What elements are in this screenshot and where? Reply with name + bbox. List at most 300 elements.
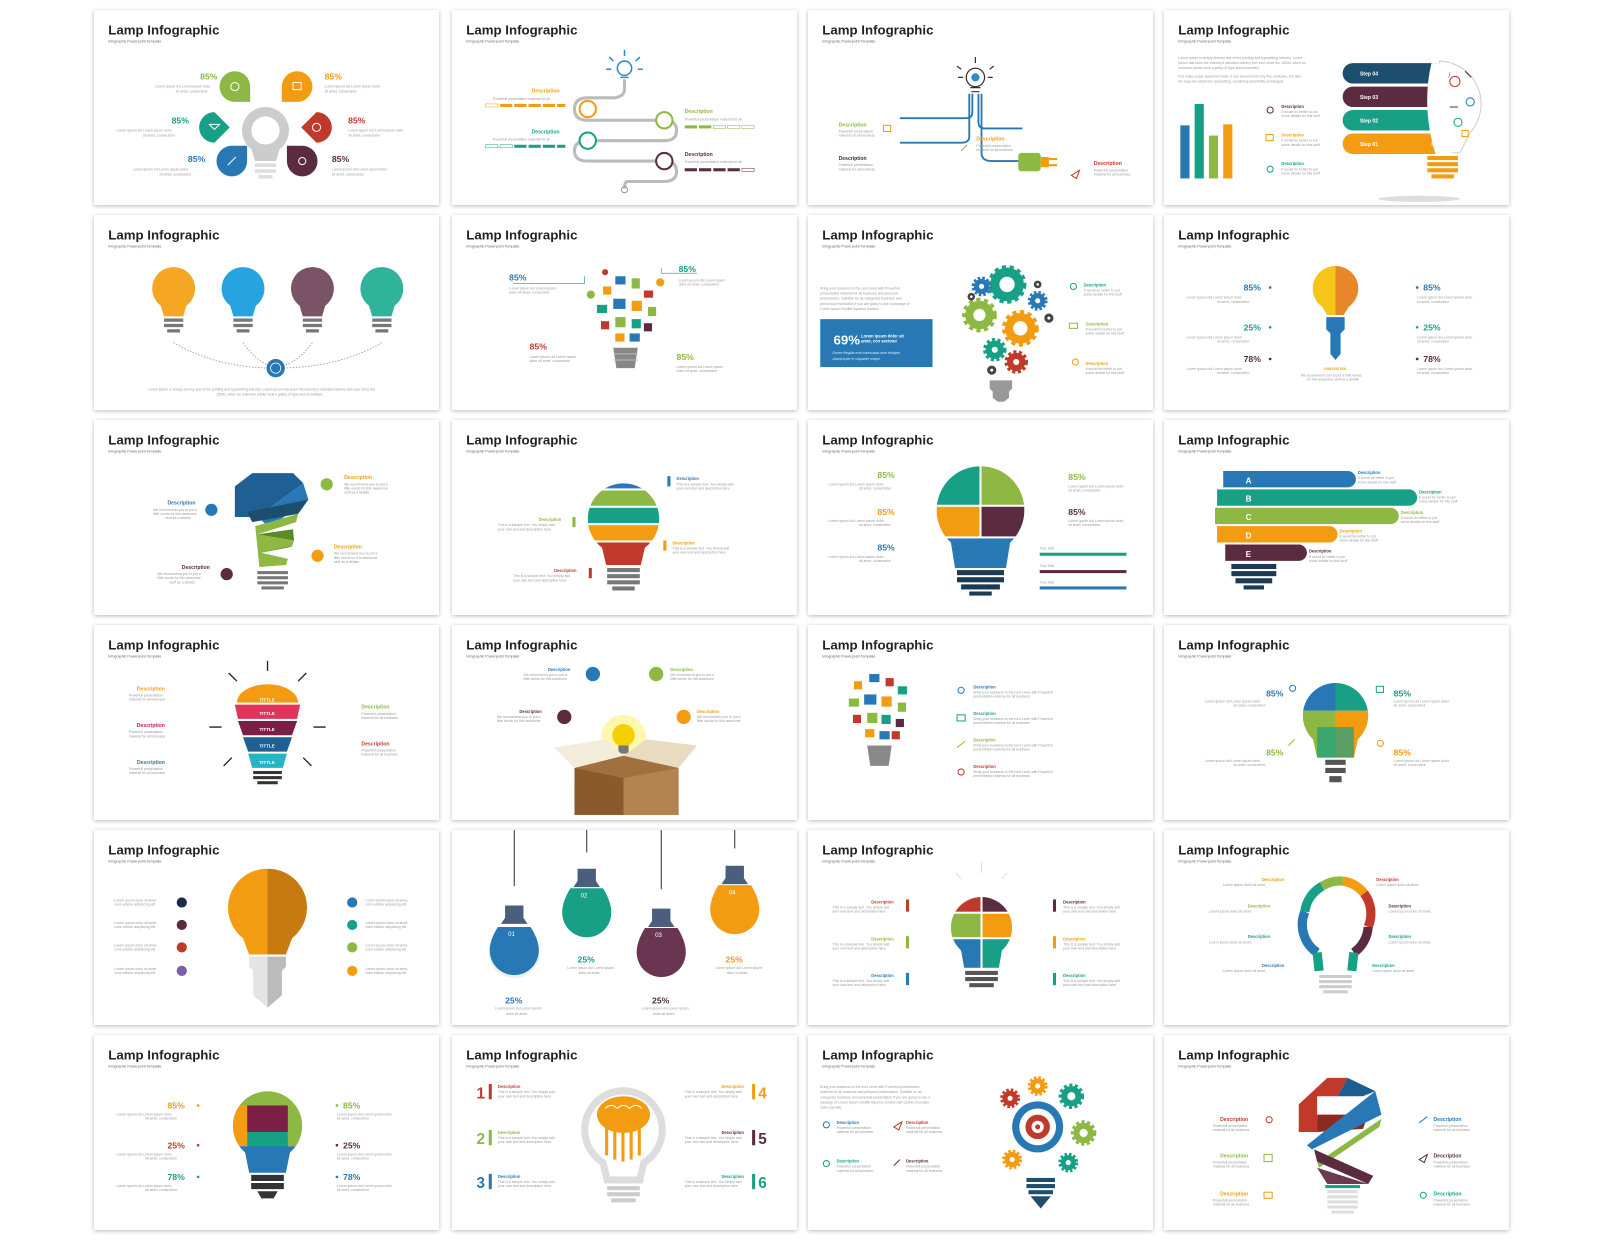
- slide 13: funnel bulb: [94, 625, 439, 820]
- slide 9: ribbon bulb: stuff as a details.: [344, 491, 370, 495]
- slide 21: puzzle bulb percent: 78%: [343, 1172, 361, 1182]
- slide 24: ribbon bulb 2: Powerfull presentation: [1213, 1198, 1247, 1202]
- slide 6: icon bulb: Infographic Powerpoint Template: [466, 245, 519, 249]
- slide 24: ribbon bulb 2: Powerfull presentation: [1213, 1161, 1247, 1165]
- slide 3: lamp with plug: Description: [839, 156, 867, 162]
- slide 4: steps bulb: 03: [1431, 95, 1437, 101]
- slide 11: quadrant bulb: Lamp Infographic: [822, 433, 933, 448]
- slide 6: icon bulb: Lorem ipsum dol Lorem ipsum: [530, 355, 576, 359]
- skill bars: Your Skill: [1040, 547, 1054, 551]
- slide 16: puzzle bulb: Infographic Powerpoint Template: [1178, 655, 1231, 659]
- slide 9: ribbon bulb: little words for this awesome: [157, 576, 201, 580]
- slide 11: quadrant bulb: sit amet, consectetur: [859, 559, 892, 563]
- slide 18: hanging bulbs: dolor sit amet.: [653, 1012, 675, 1016]
- slide 16: puzzle bulb: Lorem ipsum dol Lorem ipsum dolor: [1205, 759, 1261, 763]
- slide 12: ABCDE bands: Description: [1419, 490, 1442, 495]
- slide 19: six-part bulb: your own text and description here.: [832, 946, 887, 950]
- slide 15: doodle bulb list: Description: [973, 764, 996, 769]
- slide 16: puzzle bulb: sit amet, consectetur: [1394, 763, 1427, 767]
- slide 8: key bulb: Lorem ipsum dol Lorem ipsum dolor: [1417, 367, 1473, 371]
- slide 9: ribbon bulb: little words for this awesome: [334, 556, 378, 560]
- slide 1: petal bulb: Lorem ipsum dol Lorem ipsum dolor: [116, 128, 173, 132]
- slide 8: key bulb: 25%: [1423, 322, 1441, 332]
- slide 1: petal bulb: Lorem ipsum dol Lorem ipsum dolor: [155, 85, 211, 89]
- slide 18: hanging bulbs: dolor sit amet.: [579, 971, 600, 975]
- slide 18: hanging bulbs: [452, 830, 797, 1025]
- slide 13: funnel bulb: Powerfull presentation: [129, 693, 163, 697]
- slide 4: steps bulb: Description: [1281, 133, 1304, 138]
- slide 23: target gears bulb: Powerfull presentation: [906, 1165, 940, 1169]
- slide 13: funnel bulb: material for all business: [361, 716, 398, 720]
- slide 15: doodle bulb list: presentation material for all business: [973, 721, 1030, 725]
- slide 11: quadrant bulb: Infographic Powerpoint Template: [822, 450, 875, 454]
- slide 4: steps bulb: It would be better to put: [1281, 139, 1318, 143]
- slide 22: brain bulb: Description: [498, 1130, 521, 1135]
- slide 23: target gears bulb: Description: [906, 1120, 929, 1125]
- slide 2: winding path: Description: [685, 152, 713, 158]
- slide 8: key bulb: [1164, 215, 1509, 410]
- slide 8: key bulb: sit amet, consectetur: [1417, 340, 1450, 344]
- slide 21: puzzle bulb percent: Lorem ipsum dol Lorem ipsum dolor: [116, 1113, 173, 1117]
- slide 15: doodle bulb list: presentation material for all business: [973, 694, 1030, 698]
- slide 23: target gears bulb: Infographic Powerpoint Template: [822, 1065, 875, 1069]
- slide 12: ABCDE bands: B: [1246, 495, 1252, 504]
- slide 21: puzzle bulb percent: sit amet, consectetur: [145, 1188, 178, 1192]
- slide 21: puzzle bulb percent: Lorem ipsum dol Lorem ipsum dolor: [116, 1152, 173, 1156]
- slide 13: funnel bulb: Powerfull presentation: [129, 730, 163, 734]
- slide 8: key bulb: We recommend you to put a little words: [1301, 373, 1362, 377]
- slide 18: hanging bulbs: dolor sit amet.: [506, 1012, 528, 1016]
- bulb 04: 04: [729, 889, 736, 896]
- slide 21: puzzle bulb percent: Infographic Powerpoint Template: [108, 1065, 161, 1069]
- slide 14: box bulb: We recommend you to put a: [523, 673, 567, 677]
- slide 9: ribbon bulb: Description: [344, 475, 372, 481]
- path: [574, 79, 677, 189]
- slide 22: brain bulb: your own text and description here.: [685, 1184, 739, 1188]
- slide 16: puzzle bulb: sit amet, consectetur: [1233, 704, 1266, 708]
- slide 2: winding path: [452, 10, 797, 205]
- slide 7: gears bulb: some details for this stuff: [1086, 371, 1124, 375]
- slide 16: puzzle bulb: 85%: [1394, 748, 1411, 758]
- slide 3: lamp with plug: Description: [976, 137, 1004, 143]
- slide 22: brain bulb: This is a sample text. You simply add: [685, 1090, 742, 1094]
- slide 4: steps bulb: Description: [1281, 104, 1304, 109]
- slide 6: icon bulb: Lorem ipsum dol Lorem ipsum: [509, 287, 556, 291]
- slide 21: puzzle bulb percent: 85%: [167, 1101, 185, 1111]
- slide 13: funnel bulb: Description: [361, 741, 389, 747]
- slide 7: gears bulb: Lorem Ipsum Souffle liquorice bonbon: [820, 307, 879, 311]
- slide 7: gears bulb: Lamp Infographic: [822, 228, 933, 243]
- slide 3: lamp with plug: Infographic Powerpoint Template: [822, 40, 875, 44]
- bulb 02: [562, 869, 611, 937]
- slide 3: lamp with plug: material for all business: [1094, 172, 1131, 176]
- slide 19: six-part bulb: your own text and description here.: [1063, 910, 1117, 914]
- slide 3: lamp with plug: Description: [1094, 161, 1122, 167]
- slide 20: ring bulb: Description: [1389, 904, 1411, 909]
- slide 8: key bulb: Lamp Infographic: [1178, 228, 1289, 243]
- slide 22: brain bulb: 6: [758, 1175, 767, 1192]
- slide 9: ribbon bulb: We recommend you to put a: [153, 508, 197, 512]
- slide 21: puzzle bulb percent: Lorem ipsum dol Lorem ipsum dolor: [337, 1152, 393, 1156]
- slide 4: steps bulb: the leap into electronic typesetting, remaining essentially unchanged.: [1178, 79, 1284, 83]
- slide 9: ribbon bulb: We recommend you to put a: [344, 482, 388, 486]
- slide 7: gears bulb: It would be better to put: [1086, 327, 1122, 331]
- slide 15: doodle bulb list: Description: [973, 737, 996, 742]
- slide 21: puzzle bulb percent: 25%: [343, 1140, 361, 1150]
- slide 7: gears bulb: presentation material for all business and personal: [820, 292, 898, 296]
- slide 1: petal bulb: Infographic Powerpoint Template: [108, 40, 161, 44]
- slide 19: six-part bulb: Lamp Infographic: [822, 843, 933, 858]
- slide 1: petal bulb: 85%: [325, 71, 342, 81]
- slide 14: box bulb: Infographic Powerpoint Template: [466, 655, 519, 659]
- slide 24: ribbon bulb 2: Powerfull presentation: [1213, 1124, 1247, 1128]
- skill bars: Your Skill: [1040, 580, 1054, 584]
- slide 5: four bulbs: Lorem ipsum is simply dummy text of the printing and typesetting industry. Lorem ipsum has been the industry's standard dummy text ever since the: [148, 388, 375, 392]
- slide 11: quadrant bulb: Lorem ipsum dol Lorem ipsum dolor: [828, 482, 885, 486]
- slide 7: gears bulb: personal presentation if you are going to use a passage of: [820, 302, 910, 306]
- slide 22: brain bulb: your own text and description here.: [498, 1094, 552, 1098]
- slide 4: steps bulb: 01: [1431, 142, 1437, 148]
- slide 24: ribbon bulb 2: material for all business: [1213, 1128, 1250, 1132]
- slide 2: winding path: Powerfull presentation material for all: [493, 97, 550, 101]
- slide 13: funnel bulb: Lamp Infographic: [108, 638, 219, 653]
- slide 4: steps bulb: [1164, 10, 1509, 205]
- slide 4: steps bulb: Lorem ipsum is simply dummy text of the printing and typesetting industry. Lorem: [1178, 56, 1303, 60]
- slide 21: puzzle bulb percent: 78%: [167, 1172, 185, 1182]
- slide 20: ring bulb: Description: [1262, 877, 1285, 882]
- slide 22: brain bulb: This is a sample text. You simply add: [498, 1136, 555, 1140]
- slide 3: lamp with plug: material for all business: [976, 148, 1013, 152]
- slide 18: hanging bulbs: 25%: [726, 955, 743, 965]
- slide 17: big orange bulb: cons ectetur adipiscing elit.: [366, 925, 407, 929]
- slide 24: ribbon bulb 2: material for all business: [1213, 1202, 1250, 1206]
- slide 22: brain bulb: your own text and description here.: [685, 1094, 739, 1098]
- slide 3: lamp with plug: Lamp Infographic: [822, 23, 933, 38]
- slide 10: striped bulb: your own text and description here.: [498, 527, 552, 531]
- slide 13: funnel bulb: material for all business: [129, 698, 165, 702]
- slide 13: funnel bulb: TITTLE: [259, 744, 275, 749]
- slide 8: key bulb: for this awesome stuff as a details: [1307, 377, 1359, 381]
- slide 21: puzzle bulb percent: 85%: [343, 1101, 361, 1111]
- step bands: [1343, 63, 1450, 84]
- slide 8: key bulb: Lorem ipsum dol Lorem ipsum dolor: [1186, 336, 1243, 340]
- slide 23: target gears bulb: [808, 1035, 1153, 1230]
- slide 14: box bulb: Description: [697, 709, 720, 714]
- slide 13: funnel bulb: Description: [137, 760, 165, 766]
- slide 4: steps bulb: Step 02: [1360, 118, 1378, 124]
- slide 19: six-part bulb: This is a sample text. You simply add: [1063, 942, 1120, 946]
- slide 7: gears bulb: It would be better to put: [1084, 289, 1120, 293]
- slide 7: gears bulb: Infographic Powerpoint Template: [822, 245, 875, 249]
- slide 6: icon bulb: dolor sit amet, consectetur: [530, 359, 571, 363]
- slide 10: striped bulb: your own text and description here.: [513, 578, 567, 582]
- slide 9: ribbon bulb: stuff as a details.: [334, 560, 360, 564]
- slide 13: funnel bulb: Description: [137, 686, 165, 692]
- slide 21: puzzle bulb percent: sit amet, consectetur: [337, 1188, 370, 1192]
- slide 7: gears bulb: It would be better to put: [1086, 367, 1122, 371]
- slide 9: ribbon bulb: stuff as a details.: [165, 516, 191, 520]
- slide 17: big orange bulb: Lorem ipsum dolor sit amet,: [114, 921, 157, 925]
- slide 8: key bulb: Infographic Powerpoint Template: [1178, 245, 1231, 249]
- slide 19: six-part bulb: This is a sample text. You simply add: [832, 906, 889, 910]
- slide 15: doodle bulb list: Bring your business to the next Level with Powerfull: [973, 770, 1053, 774]
- slide 3: lamp with plug: Powerfull presentation: [1094, 168, 1128, 172]
- slide 10: striped bulb: This is a sample text. You simply add: [672, 547, 729, 551]
- slide 8: key bulb: Lorem ipsum dol Lorem ipsum dolor: [1417, 336, 1473, 340]
- slide 1: petal bulb: Lorem ipsum dol Lorem ipsum dolor: [348, 128, 404, 132]
- slide 17: big orange bulb: [94, 830, 439, 1025]
- slide 15: doodle bulb list: presentation material for all business: [973, 774, 1030, 778]
- slide 20: ring bulb: Lorem ipsum dolor sit amet,: [1209, 910, 1252, 914]
- slide 1: petal bulb: Lorem ipsum dol Lorem ipsum dolor: [133, 167, 189, 171]
- slide 6: icon bulb: 85%: [530, 342, 547, 352]
- slide 10: striped bulb: Infographic Powerpoint Template: [466, 450, 519, 454]
- slide 23: target gears bulb: Powerfull presentation: [837, 1126, 871, 1130]
- slide 1: petal bulb: [94, 10, 439, 205]
- slide 3: lamp with plug: material for all business: [839, 167, 875, 171]
- slide 19: six-part bulb: This is a sample text. You simply add: [832, 942, 889, 946]
- slide 4: steps bulb: 04: [1431, 71, 1437, 77]
- slide 17: big orange bulb: Lorem ipsum dolor sit amet,: [114, 898, 157, 902]
- slide 15: doodle bulb list: Infographic Powerpoint Template: [822, 655, 875, 659]
- slide 11: quadrant bulb: Lorem ipsum dol Lorem ipsum dolor: [828, 555, 885, 559]
- slide 23: target gears bulb: Description: [906, 1159, 929, 1164]
- slide 3: lamp with plug: [808, 10, 1153, 205]
- slide 16: puzzle bulb: Lorem ipsum dol Lorem ipsum dolor: [1205, 700, 1261, 704]
- slide 17: big orange bulb: cons ectetur adipiscing elit.: [114, 947, 156, 951]
- slide 12: ABCDE bands: It would be better to put: [1340, 534, 1376, 538]
- slide 8: key bulb: 25%: [1244, 322, 1261, 332]
- slide 24: ribbon bulb 2: Powerfull presentation: [1433, 1124, 1468, 1128]
- slide 20: ring bulb: Lamp Infographic: [1178, 843, 1289, 858]
- slide 12: ABCDE bands: Description: [1309, 549, 1332, 554]
- slide 1: petal bulb: Lorem ipsum dol Lorem ipsum dolor: [332, 167, 388, 171]
- slide 22: brain bulb: This is a sample text. You simply add: [685, 1136, 742, 1140]
- target and gears: [1012, 1101, 1063, 1152]
- slide 12: ABCDE bands: C: [1246, 513, 1252, 522]
- slide 24: ribbon bulb 2: Description: [1220, 1191, 1248, 1197]
- slide 20: ring bulb: Lorem ipsum dolor sit amet,: [1372, 969, 1415, 973]
- slide 15: doodle bulb list: Lamp Infographic: [822, 638, 933, 653]
- slide 20: ring bulb: Lorem ipsum dolor sit amet,: [1389, 910, 1431, 914]
- slide 5: four bulbs: 1500s, when an unknown printer took a galley of type and scrambled.: [216, 393, 323, 397]
- slide 17: big orange bulb: cons ectetur adipiscing elit.: [114, 971, 156, 975]
- slide 24: ribbon bulb 2: Infographic Powerpoint Template: [1178, 1065, 1231, 1069]
- slide 6: icon bulb: 85%: [679, 264, 696, 274]
- slide 14: box bulb: little words for this awesome: [697, 719, 741, 723]
- slide 22: brain bulb: Description: [498, 1174, 521, 1179]
- slide 7: gears bulb: Lorem ipsum dolor sit: [861, 334, 905, 339]
- slide 7: gears bulb: Bring your business to the next Level with Powerfull: [820, 287, 900, 291]
- slide 19: six-part bulb: [808, 830, 1153, 1025]
- slide 18: hanging bulbs: 25%: [652, 996, 670, 1006]
- slide 3: lamp with plug: material for all business: [839, 134, 875, 138]
- slide 18: hanging bulbs: Lorem ipsum dol Lorem ipsum: [567, 966, 614, 970]
- slide 19: six-part bulb: Description: [1063, 936, 1086, 941]
- slide 18: hanging bulbs: Lorem ipsum dol Lorem ipsum: [715, 966, 762, 970]
- slide 17: big orange bulb: Infographic Powerpoint Template: [108, 860, 161, 864]
- slide 23: target gears bulb: categories business and personal presentation if you are going to use a: [820, 1095, 930, 1099]
- slide 4: steps bulb: Lamp Infographic: [1178, 23, 1289, 38]
- slide 21: puzzle bulb percent: Lorem ipsum dol Lorem ipsum dolor: [337, 1113, 393, 1117]
- slide 12: ABCDE bands: Description: [1401, 510, 1424, 515]
- skill bars: Your Skill: [1040, 564, 1054, 568]
- slide 22: brain bulb: Lamp Infographic: [466, 1048, 577, 1063]
- slide 7: gears bulb: Donec fringilla erat malesuada ante tristique: [832, 351, 900, 355]
- slide 7: gears bulb: presentation. Suitable for all categories business and: [820, 297, 902, 301]
- bulb doodle half: [1440, 61, 1481, 153]
- slide 12: ABCDE bands: some details for this stuff: [1401, 520, 1439, 524]
- slide 7: gears bulb: Description: [1084, 282, 1107, 287]
- slide 9: ribbon bulb: We recommend you to put a: [157, 572, 201, 576]
- slide 1: petal bulb: sit amet, consectetur: [325, 90, 358, 94]
- slide 14: box bulb: Description: [548, 667, 571, 672]
- slide 21: puzzle bulb percent: Lorem ipsum dol Lorem ipsum dolor: [116, 1184, 173, 1188]
- petals: [220, 71, 250, 102]
- slide 4: steps bulb: Description: [1281, 161, 1304, 166]
- slide 6: icon bulb: dolor sit amet, consectetur: [509, 291, 551, 295]
- slide 16: puzzle bulb: [1164, 625, 1509, 820]
- slide 2: winding path: Powerfull presentation material for all: [493, 138, 550, 142]
- wires: [900, 94, 1022, 161]
- slide 22: brain bulb: This is a sample text. You simply add: [498, 1180, 555, 1184]
- globe: [266, 359, 285, 377]
- slide 17: big orange bulb: Lorem ipsum dolor sit amet,: [366, 921, 408, 925]
- slide 7: gears bulb: Description: [1086, 321, 1109, 326]
- slide 2: winding path: Powerfull presentation material for all: [685, 160, 742, 164]
- slide 17: big orange bulb: Lorem ipsum dolor sit amet,: [114, 967, 157, 971]
- slide 12: ABCDE bands: [1164, 420, 1509, 615]
- slide 20: ring bulb: Description: [1389, 934, 1411, 939]
- slide 17: big orange bulb: Lorem ipsum dolor sit amet,: [114, 943, 157, 947]
- slide 13: funnel bulb: material for all business: [129, 771, 165, 775]
- slide 19: six-part bulb: Description: [1063, 900, 1086, 905]
- slide 19: six-part bulb: This is a sample text. You simply add: [832, 979, 889, 983]
- slide 23: target gears bulb: Lamp Infographic: [822, 1048, 933, 1063]
- slide 14: box bulb: little words for this awesome: [497, 719, 541, 723]
- slide 24: ribbon bulb 2: Powerfull presentation: [1433, 1161, 1468, 1165]
- slide 9: ribbon bulb: We recommend you to put a: [334, 552, 377, 556]
- slide 12: ABCDE bands: D: [1246, 531, 1252, 540]
- slide 6: icon bulb: Lamp Infographic: [466, 228, 577, 243]
- slide 8: key bulb: sit amet, consectetur: [1417, 371, 1450, 375]
- slide 23: target gears bulb: passage of Lorem Ipsum Souffle liquorice bonbon tart cookie chocolate: [820, 1100, 929, 1104]
- slide 24: ribbon bulb 2: material for all business: [1433, 1202, 1470, 1206]
- slide 6: icon bulb: dolor sit amet, consectetur: [677, 369, 718, 373]
- slide 24: ribbon bulb 2: Lamp Infographic: [1178, 1048, 1289, 1063]
- slide 14: box bulb: Lamp Infographic: [466, 638, 577, 653]
- slide 23: target gears bulb: Description: [837, 1120, 860, 1125]
- slide 4: steps bulb: It would be better to put: [1281, 110, 1318, 114]
- slide 19: six-part bulb: This is a sample text. You simply add: [1063, 979, 1120, 983]
- bulb 02: 02: [581, 892, 588, 899]
- slide 12: ABCDE bands: some details for this stuff: [1419, 500, 1458, 504]
- slide 1: petal bulb: sit amet, consectetur: [332, 172, 365, 176]
- slide 22: brain bulb: Description: [498, 1084, 521, 1089]
- slide 22: brain bulb: 5: [758, 1131, 767, 1148]
- gears: [964, 267, 1052, 373]
- slide 12: ABCDE bands: It would be better to put: [1309, 555, 1345, 559]
- slide 17: big orange bulb: Lorem ipsum dolor sit amet,: [366, 967, 408, 971]
- slide 10: striped bulb: your own text and description here.: [672, 551, 726, 555]
- blue box: [820, 319, 933, 367]
- slide 15: doodle bulb list: Bring your business to the next Level with Powerfull: [973, 743, 1053, 747]
- slide 6: icon bulb: [452, 215, 797, 410]
- slide 4: steps bulb: unknown printer took a galley of type and scrambled: [1178, 66, 1259, 70]
- bulb 03: 03: [655, 932, 663, 939]
- slide 3: lamp with plug: Powerfull presentation: [839, 163, 873, 167]
- slide 18: hanging bulbs: dolor sit amet.: [727, 971, 748, 975]
- slide 11: quadrant bulb: 85%: [1068, 472, 1086, 482]
- slide 20: ring bulb: Lorem ipsum dolor sit amet,: [1223, 969, 1266, 973]
- slide 22: brain bulb: This is a sample text. You simply add: [685, 1180, 742, 1184]
- slide 19: six-part bulb: Description: [871, 900, 894, 905]
- skill bars: [1040, 547, 1126, 589]
- slide 19: six-part bulb: Description: [871, 936, 894, 941]
- slide 20: ring bulb: Description: [1248, 934, 1271, 939]
- slide 20: ring bulb: Lorem ipsum dolor sit amet,: [1209, 940, 1252, 944]
- slide 1: petal bulb: 85%: [348, 115, 366, 125]
- slide 7: gears bulb: some details for this stuff: [1084, 293, 1122, 297]
- slide 14: box bulb: [452, 625, 797, 820]
- slide 24: ribbon bulb 2: material for all business: [1213, 1165, 1250, 1169]
- slide 11: quadrant bulb: sit amet, consectetur: [1068, 488, 1101, 492]
- slide 14: box bulb: We recommend you to put a: [697, 715, 741, 719]
- slide 8: key bulb: Lorem ipsum dol Lorem ipsum dolor: [1186, 296, 1243, 300]
- slide 10: striped bulb: Description: [672, 541, 695, 546]
- slide 9: ribbon bulb: [94, 420, 439, 615]
- slide 22: brain bulb: your own text and description here.: [498, 1184, 552, 1188]
- slide 24: ribbon bulb 2: Description: [1220, 1117, 1248, 1123]
- slide 11: quadrant bulb: Lorem ipsum dol Lorem ipsum dolor: [1068, 484, 1124, 488]
- slide 18: hanging bulbs: Lorem ipsum dol Lorem ipsum: [495, 1007, 542, 1011]
- slide 6: icon bulb: 85%: [509, 272, 527, 282]
- slide 1: petal bulb: 85%: [172, 115, 189, 125]
- slide 12: ABCDE bands: some details for this stuff: [1340, 538, 1378, 542]
- slide 8: key bulb: Lorem ipsum dol Lorem ipsum dolor: [1186, 367, 1243, 371]
- slide 4: steps bulb: 02: [1431, 118, 1437, 124]
- slide 9: ribbon bulb: stuff as a details.: [170, 580, 196, 584]
- slide 8: key bulb: sit amet, consectetur: [1217, 371, 1250, 375]
- slide 8: key bulb: INNOVATION: [1324, 367, 1347, 371]
- slide 8: key bulb: Lorem ipsum dol Lorem ipsum dolor: [1417, 296, 1473, 300]
- slide 22: brain bulb: your own text and description here.: [498, 1140, 552, 1144]
- slide 20: ring bulb: Lorem ipsum dolor sit amet,: [1223, 883, 1266, 887]
- slide 6: icon bulb: Lorem ipsum dol Lorem ipsum: [679, 278, 725, 282]
- slide 17: big orange bulb: cons ectetur adipiscing elit.: [366, 947, 407, 951]
- bar chart: [1180, 104, 1232, 178]
- slide 20: ring bulb: Lorem ipsum dolor sit amet,: [1389, 940, 1431, 944]
- bulb 01: [489, 906, 540, 978]
- slide 21: puzzle bulb percent: Lamp Infographic: [108, 1048, 219, 1063]
- slide 11: quadrant bulb: 85%: [877, 507, 895, 517]
- slide 10: striped bulb: Description: [554, 568, 577, 573]
- slide 24: ribbon bulb 2: material for all business: [1433, 1128, 1470, 1132]
- ribbon: [235, 473, 303, 517]
- slide 15: doodle bulb list: Description: [973, 684, 996, 689]
- slide 10: striped bulb: This is a sample text. You simply add: [677, 482, 734, 486]
- slide 13: funnel bulb: TITTLE: [259, 760, 275, 765]
- slide 11: quadrant bulb: 85%: [877, 543, 895, 553]
- slide 5: four bulbs: [94, 215, 439, 410]
- slide 1: petal bulb: sit amet, consectetur: [348, 134, 381, 138]
- slide 23: target gears bulb: cake cupcake.: [820, 1106, 842, 1110]
- slide 17: big orange bulb: cons ectetur adipiscing elit.: [366, 971, 407, 975]
- slide 1: petal bulb: 85%: [200, 71, 218, 81]
- slide 22: brain bulb: Description: [721, 1174, 744, 1179]
- slide 1: petal bulb: Lamp Infographic: [108, 23, 219, 38]
- slide 22: brain bulb: 3: [476, 1175, 485, 1192]
